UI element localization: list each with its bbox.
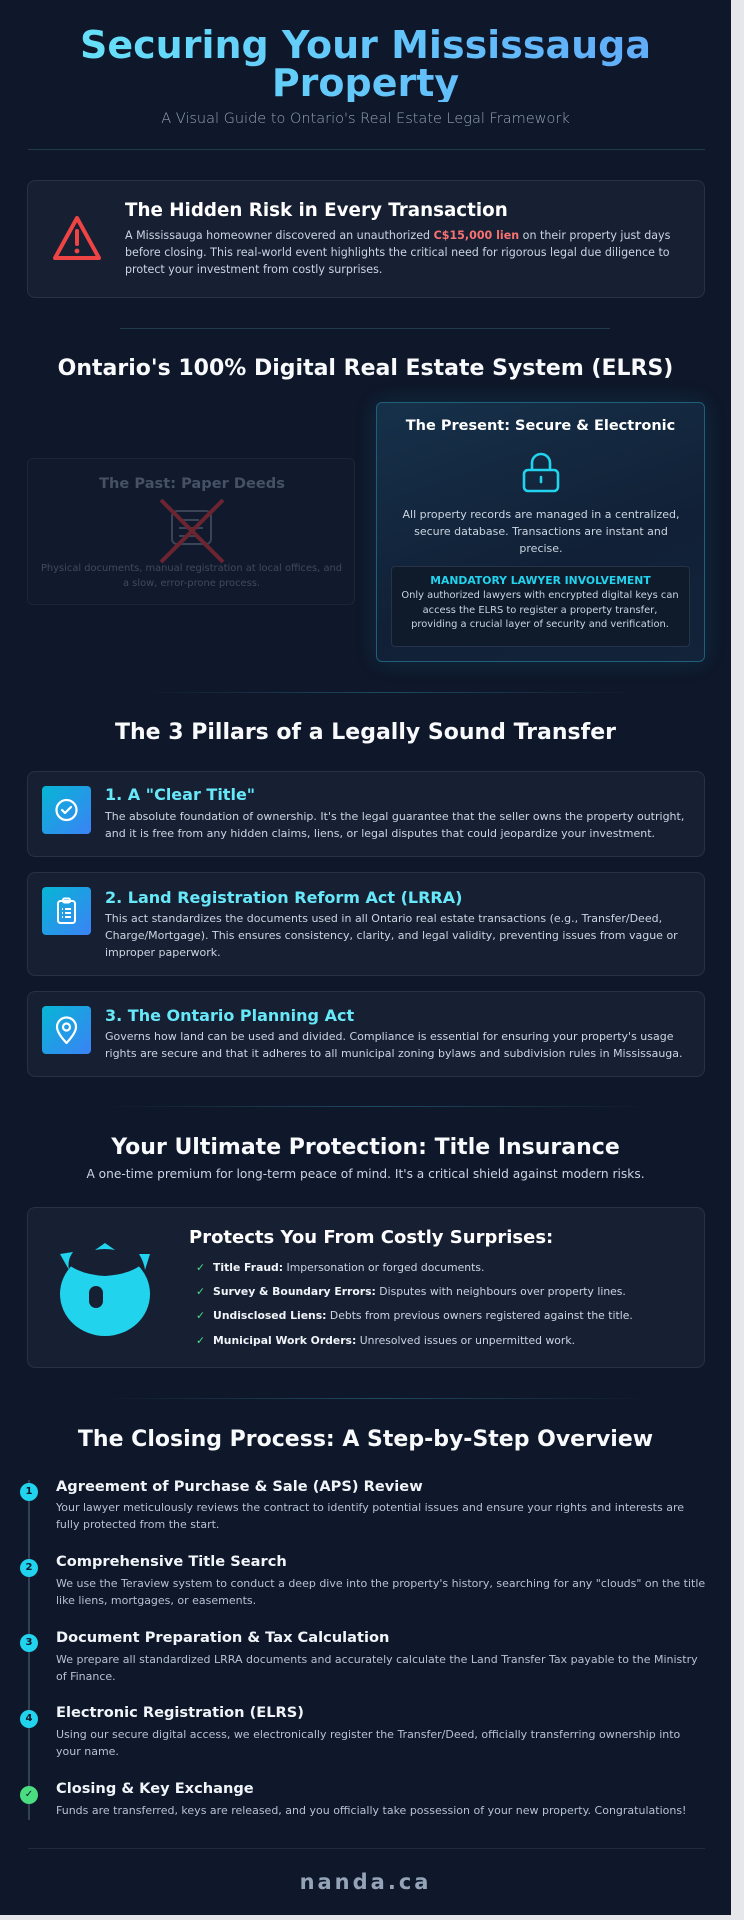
title: Securing Your Mississauga [80,23,651,67]
step 4 [20,1710,38,1728]
timeline: Electronic Registration (ELRS) [56,1704,304,1721]
timeline: Using our secure digital access, we electronically register the Transfer/Deed, officially transferring ownership into your name. [56,1728,680,1758]
step 2 [20,1559,38,1577]
timeline [20,1478,705,1820]
timeline: Closing & Key Exchange [56,1780,254,1797]
body text: A Mississauga homeowner discovered an unauthorized C$15,000 lien on their property just days before closing. This real-world event highlights the critical need for rigorous legal due diligence to protect your investment from costly surprises. [125,229,670,276]
list: risks covered: ✓ Municipal Work Orders: Unresolved issues or unpermitted work. [196,1334,575,1347]
past text: Physical documents, manual registration at local offices, and a slow, error-prone process. [41,563,342,589]
step 1 [20,1483,38,1501]
list: risks covered [196,1261,633,1347]
icon: check circle [42,786,91,834]
icon: lock [522,452,560,492]
subtitle: A Visual Guide to Ontario's Real Estate Legal Framework [161,111,570,127]
footer: brand: nanda.ca [300,1870,431,1894]
timeline: Document Preparation & Tax Calculation [56,1629,389,1646]
timeline: Comprehensive Title Search [56,1553,287,1570]
heading: protects: Protects You From Costly Surprises: [189,1227,553,1248]
panel: pillar 1: The absolute foundation of ownership. It's the legal guarantee that the seller owns the property outright, and it is free from any hidden claims, liens, or legal disputes that could jeopardize your investment. [105,810,684,840]
panel: pillar 3: Governs how land can be used and divided. Compliance is essential for ensuring your property's usage rights are secure and that it adheres to all municipal zoning bylaws and subdivision rules in Mississauga. [105,1030,683,1060]
icon: location pin [42,1006,91,1054]
past heading: The Past: Paper Deeds [99,475,285,492]
icon: crossed document [160,498,224,564]
step 1: 1 [26,1486,32,1497]
step 5 [20,1786,38,1804]
panel: protects [27,1207,705,1368]
step 4: 4 [26,1713,32,1724]
panel: pillar 1: 1. A "Clear Title" [105,785,255,804]
present text: All property records are managed in a centralized, secure database. Transactions are instant and precise. [402,508,680,555]
callout: mandatory lawyer [391,566,690,647]
panel: pillar 2: This act standardizes the documents used in all Ontario real estate transactions (e.g., Transfer/Deed, Charge/Mortgage). This ensures consistency, clarity, and legal validity, preventing issues from vague or improper paperwork. [105,912,678,959]
panel: pillar 2 [27,872,705,976]
timeline: Your lawyer meticulously reviews the contract to identify potential issues and ensure your rights and interests are fully protected from the start. [56,1500,684,1530]
step 5: ✓ [25,1789,33,1800]
list: risks covered: ✓ Title Fraud: Impersonation or forged documents. [196,1261,484,1274]
heading: closing process: The Closing Process: A Step-by-Step Overview [78,1427,653,1452]
panel: past paper deeds [27,458,355,605]
subtitle: title insurance: A one-time premium for long-term peace of mind. It's a critical shield against modern risks. [86,1167,645,1181]
heading: The Hidden Risk in Every Transaction [125,200,508,221]
panel: pillar 3 [27,991,705,1077]
heading: title insurance: Your Ultimate Protection: Title Insurance [111,1135,620,1160]
step 2: 2 [26,1562,32,1573]
panel: pillar 2: 2. Land Registration Reform Act (LRRA) [105,888,462,907]
panel: hidden risk [27,180,705,298]
panel: pillar 3: 3. The Ontario Planning Act [105,1006,354,1025]
list: risks covered: ✓ Survey & Boundary Errors: Disputes with neighbours over property lines. [196,1285,626,1298]
timeline: We prepare all standardized LRRA documents and accurately calculate the Land Transfer Tax payable to the Ministry of Finance. [56,1652,698,1682]
list: risks covered: ✓ Undisclosed Liens: Debts from previous owners registered against the title. [196,1309,633,1322]
icon: shield [60,1243,150,1336]
present heading: The Present: Secure & Electronic [406,418,675,434]
timeline: We use the Teraview system to conduct a deep dive into the property's history, searching for any "clouds" on the title like liens, mortgages, or easements. [56,1576,705,1606]
timeline: Agreement of Purchase & Sale (APS) Review [56,1478,423,1495]
callout: mandatory lawyer: Only authorized lawyers with encrypted digital keys can access the ELRS to register a property transfer, providing a crucial layer of security and verification. [401,590,679,630]
step 3 [20,1634,38,1652]
heading: ELRS: Ontario's 100% Digital Real Estate System (ELRS) [58,356,673,381]
title [0,26,731,102]
panel: pillar 1 [27,771,705,857]
icon: warning [53,216,102,260]
callout: mandatory lawyer: MANDATORY LAWYER INVOLVEMENT [430,574,651,587]
title: Property [272,61,459,105]
panel: present electronic [376,402,705,662]
timeline: Funds are transferred, keys are released, and you officially take possession of your new property. Congratulations! [56,1804,686,1816]
step 3: 3 [26,1637,32,1648]
heading: 3 pillars: The 3 Pillars of a Legally Sound Transfer [115,720,616,745]
icon: clipboard [42,887,91,935]
